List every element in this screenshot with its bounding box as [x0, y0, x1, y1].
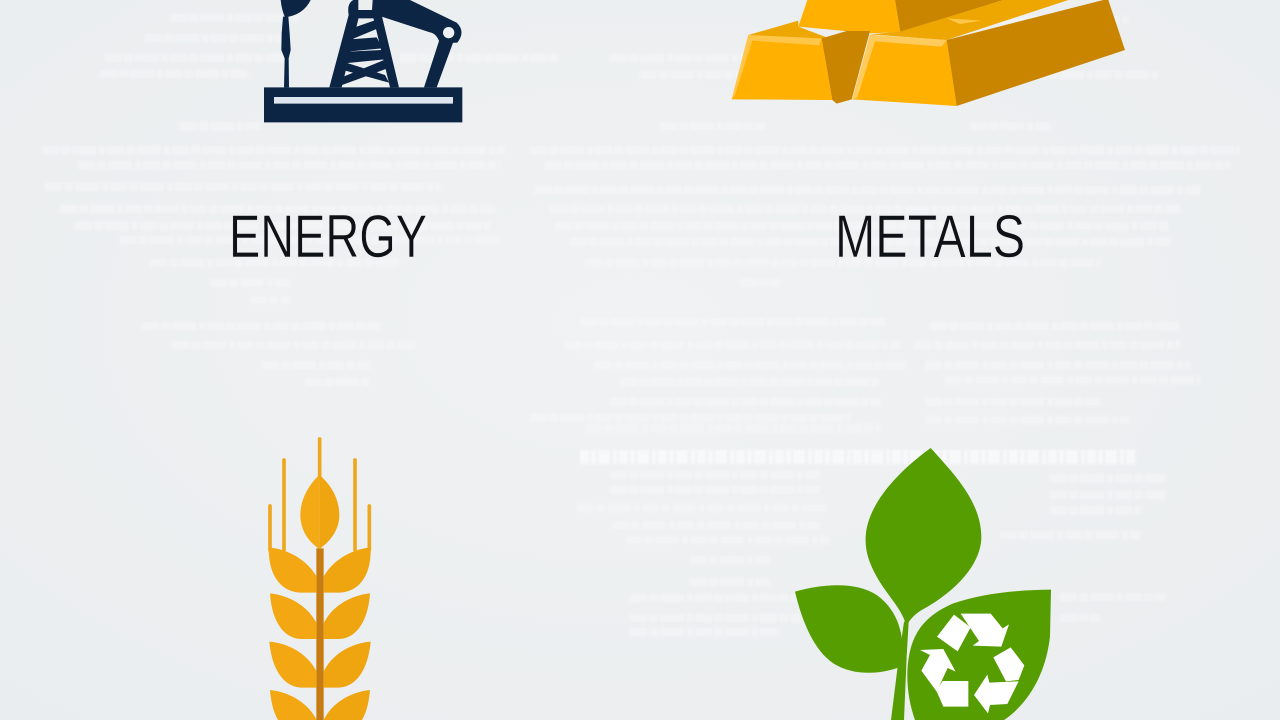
- horsehead and rod: [281, 0, 311, 17]
- derrick tower: [329, 15, 399, 87]
- icon: oil pumpjack: [264, 0, 462, 122]
- left leaf: [795, 585, 903, 673]
- top leaf: [866, 448, 981, 627]
- heading: METALS: METALS: [835, 203, 1025, 270]
- heading: ENERGY: ENERGY: [229, 203, 427, 270]
- walking beam: [372, 0, 462, 43]
- right leaf: [907, 590, 1051, 720]
- recycling arrows: [920, 614, 1024, 713]
- icon: wheat: [269, 439, 371, 720]
- wheat stem: [316, 548, 324, 720]
- grain leaves right: [324, 547, 371, 720]
- icon: green leaves with recycling symbol: [795, 448, 1051, 720]
- top grain: [319, 475, 339, 549]
- right gold bar: [870, 0, 1068, 40]
- upper gold bar: [798, 0, 900, 33]
- grain leaves left: [269, 547, 317, 720]
- pumpjack base: [264, 87, 462, 122]
- icon: gold bars: [732, 0, 1125, 106]
- wheat awns: [270, 439, 369, 550]
- left gold bar: [748, 21, 827, 40]
- faded bright headline strip: [580, 450, 1137, 464]
- faded illegible ghost text: [42, 18, 1240, 632]
- stem: [891, 622, 909, 720]
